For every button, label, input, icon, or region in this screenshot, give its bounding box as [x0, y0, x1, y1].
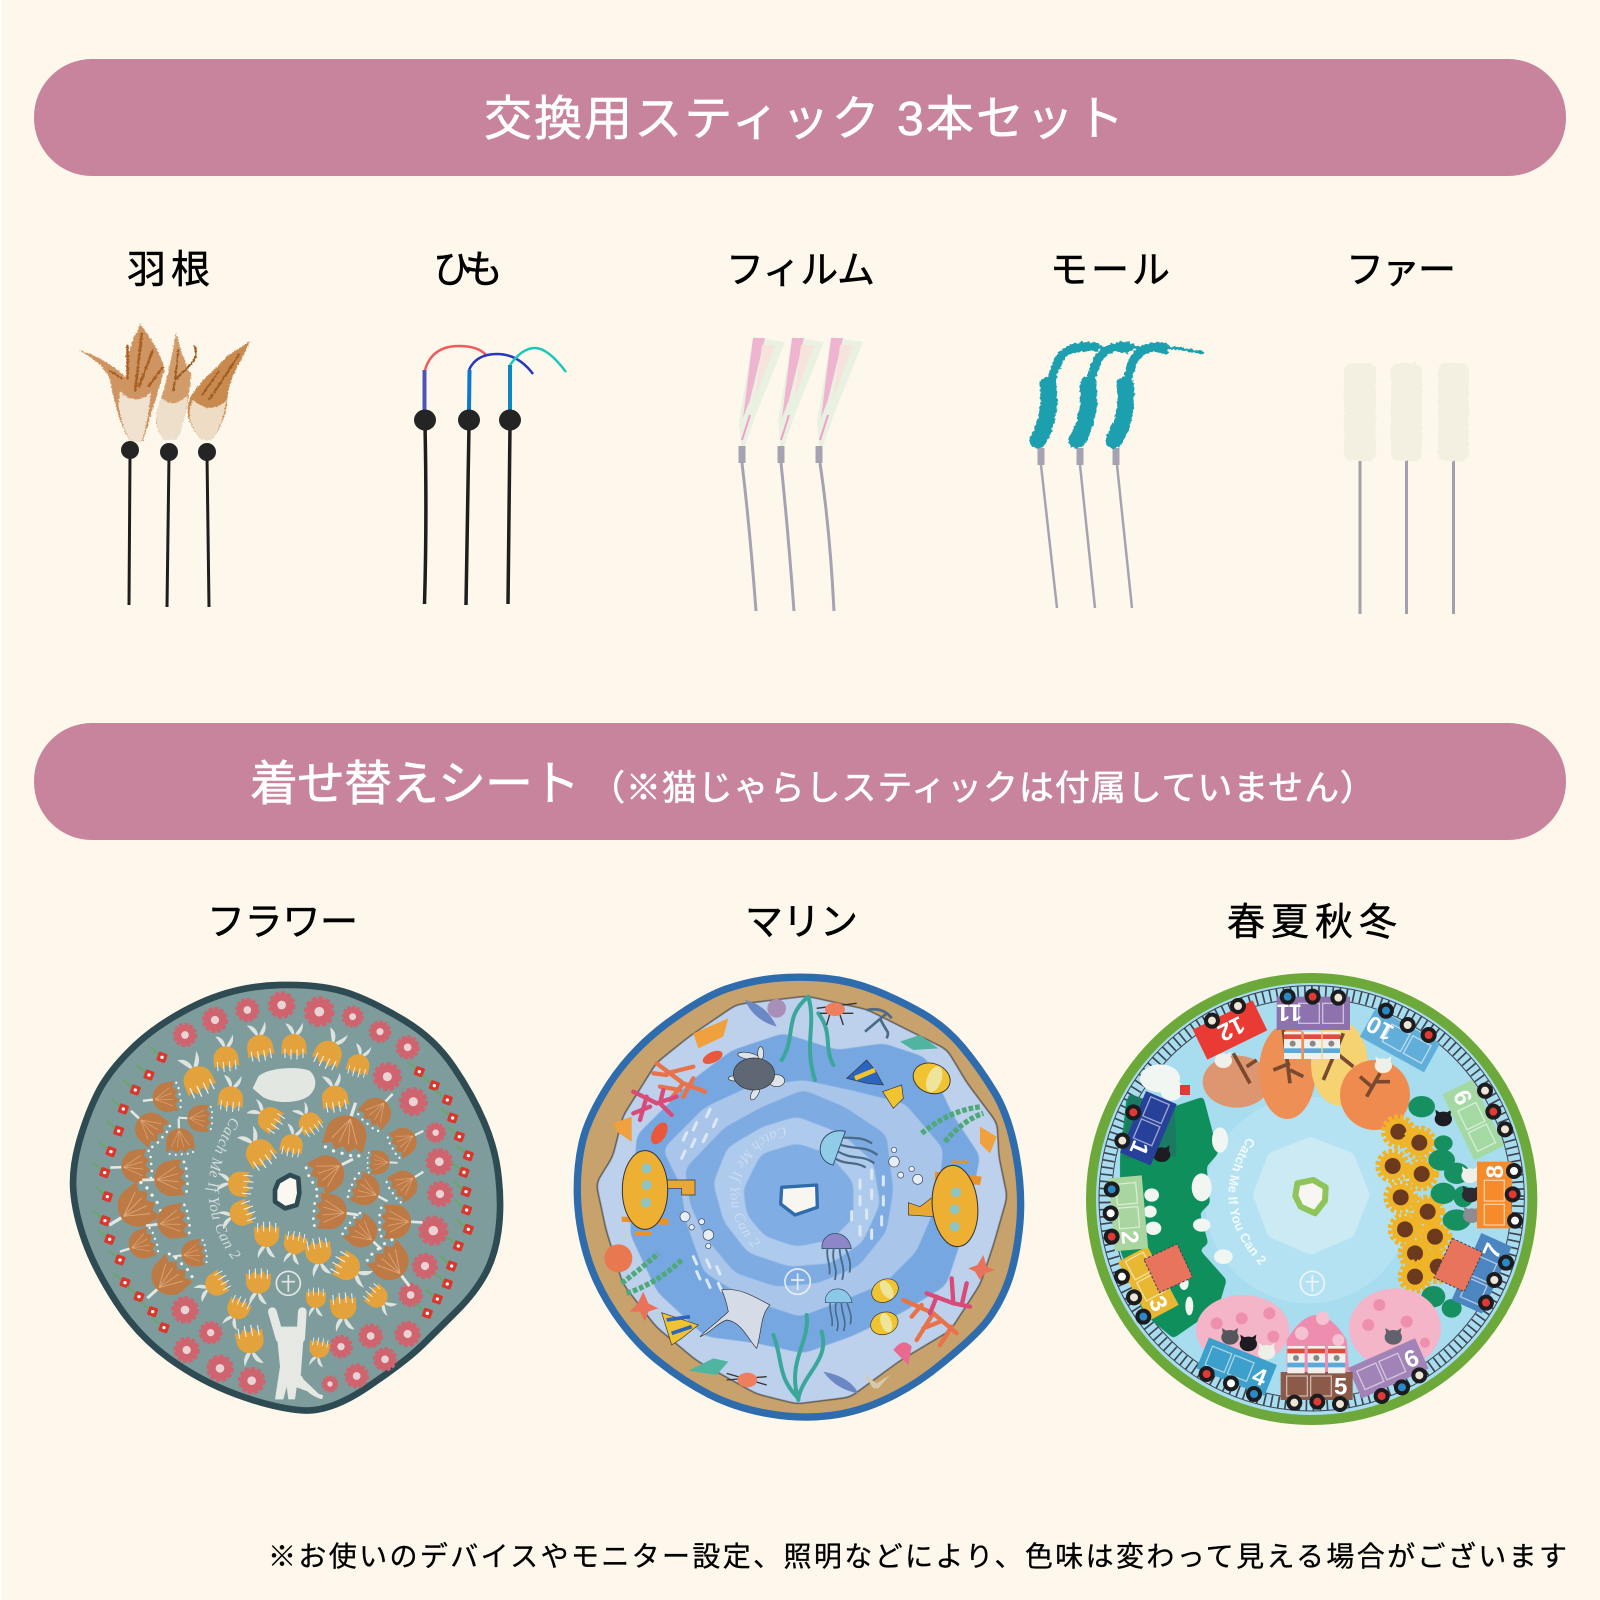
railway track — [1099, 986, 1524, 1411]
pale circle — [1205, 1097, 1412, 1303]
flowers: orange tulips — [173, 1021, 400, 1368]
flowers: red camellias — [173, 993, 451, 1392]
text: catch me: Catch Me If You Can 2 — [205, 1118, 240, 1260]
text: catch me: Catch Me If You Can 2 — [728, 1128, 786, 1247]
trains: 8 — [1482, 1165, 1509, 1178]
trees: autumn — [1203, 1021, 1410, 1130]
label: chenille: モール — [1050, 250, 1170, 292]
icon: crabs and anchor — [727, 1003, 892, 1387]
trains: 3 — [1143, 1292, 1173, 1316]
icon: left submarine — [622, 1151, 695, 1236]
icon: green plants — [622, 1107, 983, 1293]
sticks: string — [414, 346, 566, 605]
sheet hole — [1295, 1180, 1326, 1213]
sheet: flower — [70, 982, 504, 1414]
text: catch me: Catch Me If You Can 2 — [1228, 1138, 1266, 1266]
banner: replacement sheets: 着せ替えシート — [250, 758, 580, 811]
sticks: fur — [1344, 363, 1469, 614]
trains: 6 — [1400, 1344, 1423, 1374]
icon: fish group — [648, 1048, 955, 1345]
label: feather: 羽根 — [127, 249, 210, 292]
trains: 10 — [1362, 1009, 1398, 1046]
icon: standing cat — [272, 1312, 323, 1399]
icon: coral — [633, 1063, 970, 1345]
cats — [1153, 1051, 1480, 1360]
flowers: small red — [93, 1047, 474, 1334]
label: film: フィルム — [726, 250, 875, 292]
banner: replacement sheets: （※猫じゃらしスティックは付属していません） — [590, 769, 1375, 808]
trains: 9 — [1448, 1085, 1478, 1109]
icon: jellyfish — [816, 1125, 881, 1331]
trains: 7 — [1478, 1239, 1508, 1263]
sheet hole — [275, 1175, 299, 1208]
banner: replacement sticks: 交換用スティック 3本セット — [484, 93, 1124, 146]
trains: 2 — [1115, 1230, 1143, 1245]
icon: turtle — [728, 1047, 785, 1101]
label: fur: ファー — [1346, 250, 1456, 292]
icon: bubbles — [680, 1147, 923, 1249]
trees: winter — [1120, 1064, 1233, 1338]
icon: logo — [1300, 1271, 1324, 1295]
wheels — [1105, 991, 1521, 1410]
trains — [1109, 997, 1512, 1401]
label: flower: フラワー — [207, 902, 358, 944]
white fish schools — [682, 1109, 883, 1291]
cargo: cans — [1144, 1238, 1483, 1293]
banner: replacement sticks — [34, 59, 1566, 176]
cargo: food boxes — [1284, 1032, 1345, 1373]
trains: 1 — [1124, 1136, 1154, 1159]
icon: sleeping cat — [253, 1068, 315, 1102]
icon: logo — [276, 1271, 300, 1295]
trains: 12 — [1213, 1010, 1249, 1046]
center pale shape — [1253, 1137, 1370, 1255]
trees: spring — [1196, 1288, 1441, 1383]
leaves — [1408, 1096, 1473, 1318]
footnote: ※お使いのデバイスやモニター設定、照明などにより、色味は変わって見える場合がございます — [268, 1541, 1567, 1572]
sunflowers — [1379, 1118, 1451, 1290]
icon: right submarine — [908, 1161, 982, 1248]
banner: replacement sheets — [34, 723, 1566, 840]
sheet: seasons — [1086, 973, 1538, 1425]
label: four seasons: 春夏秋冬 — [1227, 902, 1397, 944]
trains: 11 — [1277, 999, 1302, 1026]
icon: seaweed — [773, 997, 833, 1400]
sticks: feather — [79, 324, 360, 825]
sheet hole — [781, 1185, 817, 1215]
flowers: brown tulips — [98, 1080, 432, 1313]
icon: manta ray — [700, 1289, 770, 1348]
sticks: film — [739, 337, 863, 611]
sheet: marine — [574, 974, 1024, 1421]
label: string: ひも — [433, 249, 503, 292]
icon: starfish and shells — [604, 999, 997, 1393]
label: marine: マリン — [745, 902, 858, 944]
icon: logo — [785, 1269, 810, 1294]
trains: 5 — [1334, 1374, 1347, 1401]
trains: 4 — [1248, 1362, 1271, 1392]
sticks: chenille — [1038, 347, 1203, 608]
